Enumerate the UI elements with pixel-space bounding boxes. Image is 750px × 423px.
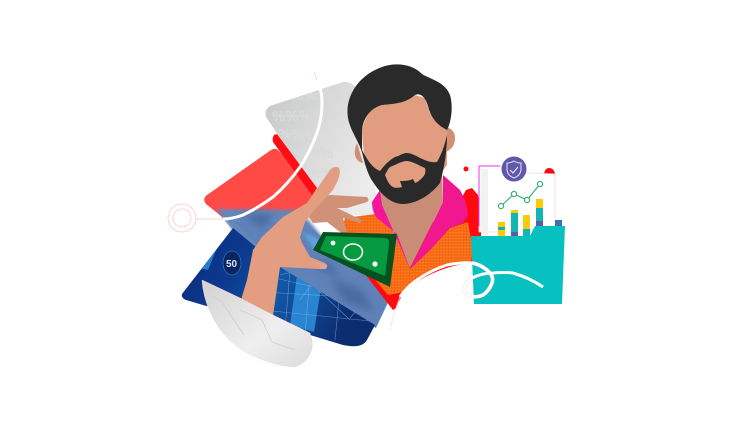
palm, arm, index finger and thumb [240, 167, 340, 316]
thumb nail [320, 264, 327, 269]
left collar [372, 190, 410, 269]
document [479, 166, 555, 232]
gauge with 50 [223, 251, 241, 275]
panel: teal folder with chart [471, 156, 565, 304]
face [362, 95, 447, 195]
percent pattern: %%% [290, 87, 330, 104]
percent pattern: %% [308, 164, 335, 181]
red shirt shadow [355, 188, 484, 310]
panel: person [340, 64, 484, 310]
red dot [464, 166, 468, 172]
panel: blurred blue backdrop [216, 209, 400, 330]
glowing column [290, 277, 320, 332]
gauge with 50: 50 [226, 259, 238, 270]
left ear [355, 143, 363, 163]
panel: dark blue chart background [182, 228, 375, 346]
hair [347, 64, 452, 152]
line chart [498, 181, 543, 209]
panel: white shirt cuff [202, 280, 312, 367]
percent pattern: %%% [293, 145, 333, 162]
percent pattern: %%%% [272, 108, 325, 125]
percent pattern [272, 95, 308, 139]
banknote [313, 232, 397, 287]
panel: grey percent card [266, 82, 380, 215]
orange shirt [340, 214, 473, 295]
panel: hand with cash [240, 167, 397, 316]
illustration [168, 64, 565, 368]
percent pattern: %%% [278, 126, 318, 143]
icon: shield badge [502, 156, 526, 182]
decorative swirl: right loop and arc [390, 263, 543, 330]
beard [361, 135, 447, 204]
red splash [544, 168, 555, 174]
bar chart [498, 199, 562, 236]
right ear [446, 127, 455, 152]
decorative swirl: left loop and arc [168, 72, 322, 232]
neck [380, 172, 443, 268]
panel: red card [204, 134, 320, 222]
panel: white area under arc [388, 263, 473, 345]
right collar [410, 175, 468, 269]
back fingers [305, 195, 368, 232]
folder [471, 226, 565, 304]
